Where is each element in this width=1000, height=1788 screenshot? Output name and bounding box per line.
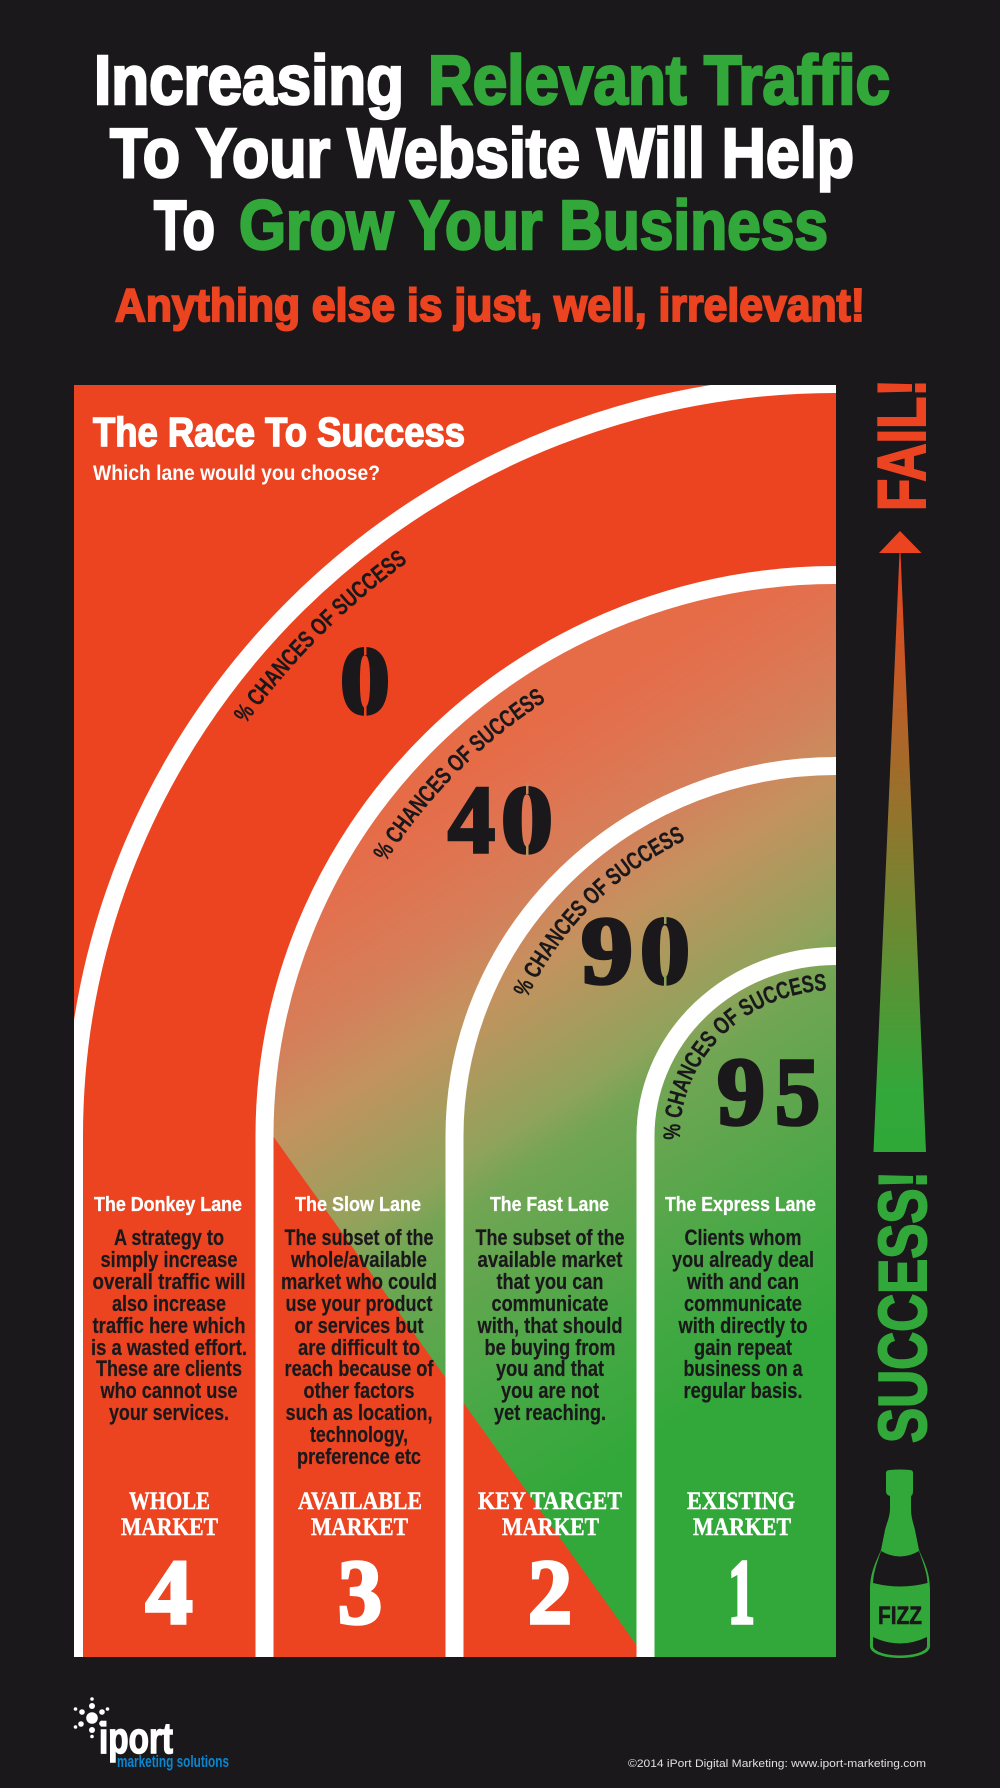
lane description: are difficult to bbox=[298, 1335, 420, 1360]
number: 95 bbox=[717, 1038, 820, 1145]
lane description bbox=[672, 1225, 814, 1403]
heading: the race to success: Which lane would you choose? bbox=[93, 462, 380, 485]
lane title: The Slow Lane bbox=[295, 1193, 421, 1216]
market label: MARKET bbox=[311, 1514, 408, 1541]
lane description: such as location, bbox=[286, 1400, 432, 1425]
number: 40 bbox=[448, 766, 553, 873]
lane description: whole/available bbox=[290, 1247, 427, 1272]
lane description: These are clients bbox=[96, 1356, 242, 1381]
lane description: who cannot use bbox=[100, 1378, 238, 1403]
number: 90 bbox=[581, 897, 690, 1004]
heading: the race to success bbox=[93, 409, 465, 485]
lane description: The subset of the bbox=[284, 1225, 434, 1250]
lane description: use your product bbox=[286, 1291, 433, 1316]
market label bbox=[298, 1488, 422, 1541]
lane description: with, that should bbox=[477, 1313, 622, 1338]
lane description: with directly to bbox=[678, 1313, 808, 1338]
title: Increasing bbox=[94, 41, 404, 119]
number: 0: 0 bbox=[340, 627, 390, 734]
lane description: simply increase bbox=[100, 1247, 238, 1272]
gradient lanes area bbox=[273, 584, 836, 1657]
number: 95: 9 bbox=[717, 1038, 765, 1145]
curved label: chances lane 4: % CHANCES OF SUCCESS bbox=[234, 550, 406, 722]
lane description: overall traffic will bbox=[92, 1269, 246, 1294]
lane description: that you can bbox=[496, 1269, 604, 1294]
curved label: chances lane 2: % CHANCES OF SUCCESS bbox=[514, 826, 684, 996]
market label: WHOLE bbox=[129, 1488, 210, 1515]
lane description: be buying from bbox=[484, 1335, 616, 1360]
lane description: also increase bbox=[112, 1291, 226, 1316]
lane description: with and can bbox=[686, 1269, 799, 1294]
logo: iport bbox=[74, 1697, 229, 1771]
lane title: The Donkey Lane bbox=[94, 1193, 242, 1216]
number: 90: 9 bbox=[581, 897, 633, 1004]
white lane lines bbox=[74, 384, 836, 1660]
market label: MARKET bbox=[693, 1514, 791, 1541]
icon: bottle bbox=[870, 1470, 930, 1658]
title: To bbox=[154, 186, 215, 264]
lane description: traffic here which bbox=[92, 1313, 246, 1338]
lane description: yet reaching. bbox=[494, 1400, 606, 1425]
rank number: 1 bbox=[728, 1541, 755, 1643]
lane title: The Fast Lane bbox=[490, 1193, 609, 1216]
market label: KEY TARGET bbox=[478, 1488, 622, 1515]
lane description: or services but bbox=[294, 1313, 424, 1338]
tagline: marketing solutions bbox=[117, 1752, 229, 1771]
lane description: other factors bbox=[304, 1378, 414, 1403]
market label: MARKET bbox=[502, 1514, 599, 1541]
title bbox=[94, 41, 890, 264]
rank number: 3 bbox=[338, 1541, 382, 1643]
curved label: chances lane 3: % CHANCES OF SUCCESS bbox=[373, 688, 544, 860]
title: Relevant Traffic bbox=[428, 41, 890, 119]
lane: donkey bbox=[91, 1193, 247, 1643]
lane description: market who could bbox=[281, 1269, 437, 1294]
lane description: you are not bbox=[501, 1378, 600, 1403]
market label: AVAILABLE bbox=[298, 1488, 422, 1515]
lane description: A strategy to bbox=[114, 1225, 224, 1250]
lane description bbox=[281, 1225, 437, 1469]
curved label: chances lane 1: % CHANCES OF SUCCESS bbox=[663, 974, 826, 1140]
market label bbox=[687, 1488, 795, 1541]
lane description: business on a bbox=[684, 1356, 803, 1381]
lane title: The Express Lane bbox=[665, 1193, 816, 1216]
lane description: your services. bbox=[109, 1400, 229, 1425]
market label bbox=[121, 1488, 218, 1541]
rank number: 2 bbox=[528, 1541, 572, 1643]
number: 40: 4 bbox=[448, 766, 495, 873]
label: SUCCESS!: SUCCESS! bbox=[865, 1171, 941, 1443]
lane description bbox=[476, 1225, 624, 1425]
number: 40: 0 bbox=[501, 766, 553, 873]
lane description: gain repeat bbox=[694, 1335, 793, 1360]
arrow head bbox=[879, 531, 922, 553]
number: 90: 0 bbox=[640, 897, 690, 1004]
lane description: you already deal bbox=[672, 1247, 814, 1272]
number: 95: 5 bbox=[775, 1038, 820, 1145]
market label: EXISTING bbox=[687, 1488, 795, 1515]
lane: slow bbox=[281, 1193, 437, 1643]
tapered spike bbox=[874, 553, 926, 1152]
lane description: Clients whom bbox=[684, 1225, 802, 1250]
title: Grow Your Business bbox=[239, 186, 828, 264]
lane description: technology, bbox=[310, 1422, 408, 1447]
lane description: preference etc bbox=[297, 1444, 421, 1469]
title: To Your Website Will Help bbox=[110, 114, 854, 192]
lane description bbox=[91, 1225, 247, 1425]
icon: sun dots bbox=[74, 1697, 109, 1738]
label: FAIL!: FAIL! bbox=[864, 379, 940, 511]
panel: race track bbox=[74, 384, 836, 1660]
lane description: available market bbox=[478, 1247, 623, 1272]
arrow: fail to success scale bbox=[874, 531, 926, 1152]
lane: express bbox=[665, 1193, 816, 1643]
lane description: regular basis. bbox=[684, 1378, 802, 1403]
subtitle: Anything else is just, well, irrelevant! bbox=[115, 279, 865, 331]
outer orange lane bbox=[74, 385, 836, 1657]
lane description: The subset of the bbox=[476, 1225, 624, 1250]
lane description: you and that bbox=[496, 1356, 605, 1381]
rank number: 4 bbox=[146, 1541, 192, 1643]
heading: the race to success: The Race To Success bbox=[93, 409, 465, 455]
market label bbox=[478, 1488, 622, 1541]
bottle label: FIZZ bbox=[878, 1602, 922, 1630]
lane: fast bbox=[476, 1193, 624, 1643]
lane description: communicate bbox=[684, 1291, 802, 1316]
wordmark: iport bbox=[99, 1714, 173, 1763]
lane description: reach because of bbox=[284, 1356, 434, 1381]
lane description: is a wasted effort. bbox=[91, 1335, 247, 1360]
copyright: ©2014 iPort Digital Marketing: www.iport-marketing.com bbox=[628, 1758, 926, 1770]
lane description: communicate bbox=[492, 1291, 608, 1316]
market label: MARKET bbox=[121, 1514, 218, 1541]
